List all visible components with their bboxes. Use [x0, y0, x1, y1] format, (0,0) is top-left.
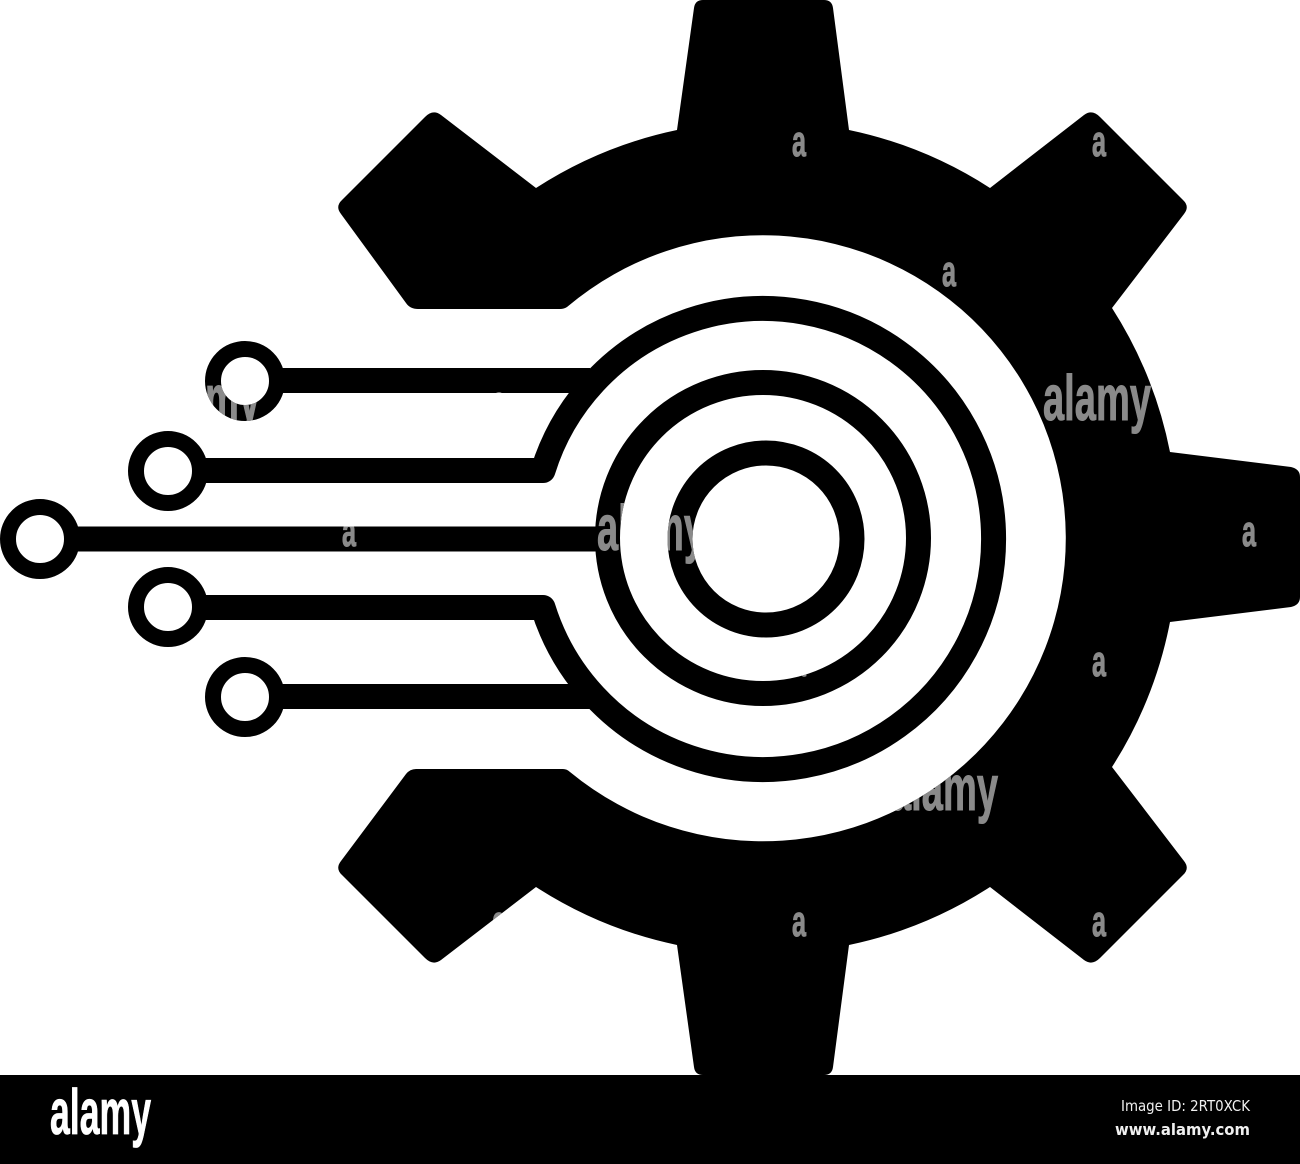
- middle ring: [608, 382, 918, 694]
- website: www.alamy.com: [1115, 1120, 1250, 1139]
- watermarks: alamy: [890, 752, 998, 824]
- watermarks: a: [1092, 637, 1106, 686]
- watermarks: a: [792, 637, 806, 686]
- inner ring: [680, 453, 852, 625]
- watermarks: a: [792, 117, 806, 166]
- watermarks: alamy: [1043, 362, 1151, 434]
- watermarks: [152, 117, 1256, 946]
- watermarks: alamy: [152, 362, 260, 434]
- gear body: [338, 0, 1300, 1075]
- circuit nodes: [8, 349, 277, 729]
- outer circuit ring with second and fourth traces: [195, 308, 994, 770]
- top trace: [275, 368, 590, 393]
- watermarks: a: [942, 247, 956, 296]
- bottom trace: [275, 684, 592, 709]
- watermarks: a: [1242, 507, 1256, 556]
- footer logo: alamy: [50, 1076, 151, 1148]
- watermarks: a: [492, 897, 506, 946]
- watermarks: a: [342, 507, 356, 556]
- image id: Image ID: 2RT0XCK: [1121, 1097, 1251, 1115]
- watermarks: a: [1092, 897, 1106, 946]
- footer bar: [0, 1075, 1300, 1164]
- middle trace: [70, 526, 610, 552]
- watermarks: alamy: [597, 492, 705, 564]
- watermarks: a: [492, 377, 506, 426]
- watermarks: a: [1092, 117, 1106, 166]
- watermarks: a: [792, 897, 806, 946]
